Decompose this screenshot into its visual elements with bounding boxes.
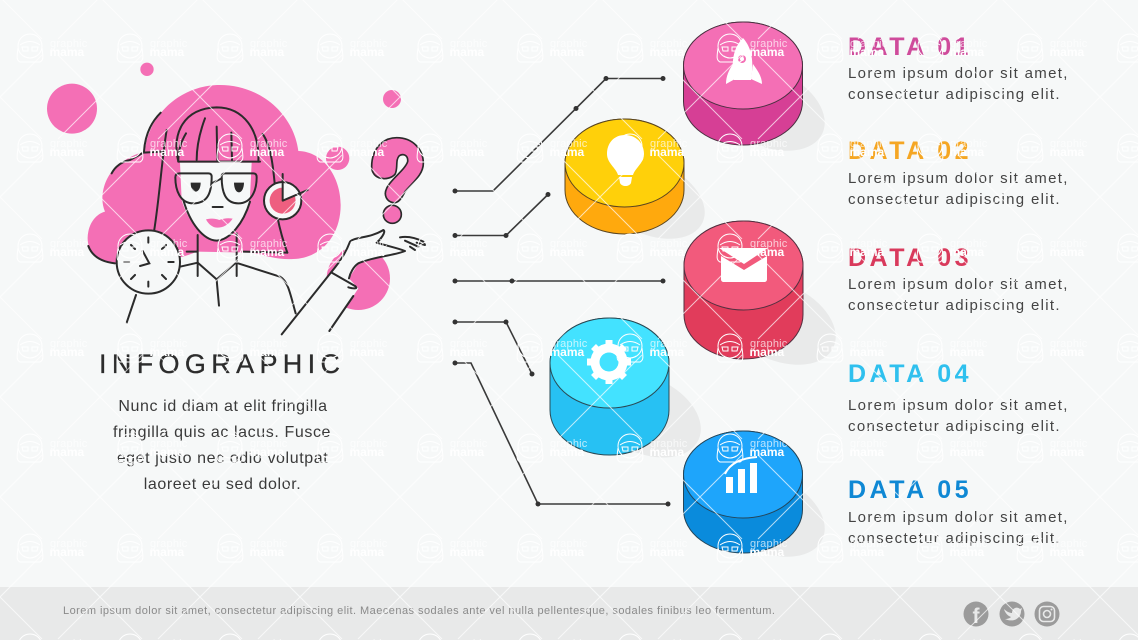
data 05 text: Lorem ipsum dolor sit amet, xyxy=(848,509,1069,526)
pink decorative circles xyxy=(47,63,401,310)
icon: instagram xyxy=(1034,602,1060,626)
cylinder 3: red envelope xyxy=(684,221,849,382)
arm and hand fill xyxy=(282,230,405,334)
data 04 text: DATA 04 xyxy=(848,360,972,388)
cylinder 4: cyan gear xyxy=(550,318,715,474)
connector 1 xyxy=(452,76,666,194)
data 05 text: DATA 05 xyxy=(848,476,972,504)
connector lines xyxy=(452,76,670,506)
intro paragraph: eget justo nec odio volutpat xyxy=(117,450,328,467)
data 01 text: Lorem ipsum dolor sit amet, xyxy=(848,65,1069,82)
wall clock xyxy=(117,230,180,294)
data 01 text: consectetur adipiscing elit. xyxy=(848,86,1061,103)
icon: gear xyxy=(587,340,631,384)
face xyxy=(180,163,252,241)
data 02 text xyxy=(848,137,1069,208)
icon: light bulb xyxy=(607,135,644,186)
data 01 text xyxy=(848,33,1069,103)
footer band xyxy=(0,587,1138,640)
data 02 text: Lorem ipsum dolor sit amet, xyxy=(848,170,1069,187)
connector 4 xyxy=(452,320,534,376)
footer text: Lorem ipsum dolor sit amet, consectetur adipiscing elit. Maecenas sodales ante vel nulla pellentesque, sodales finibus leo fermentum. xyxy=(63,605,775,617)
intro paragraph xyxy=(113,398,331,493)
icon: twitter xyxy=(1000,602,1024,626)
data 03 text xyxy=(848,244,1069,314)
data 05 text: consectetur adipiscing elit. xyxy=(848,530,1061,547)
connector 3 xyxy=(452,278,666,284)
pink hair cloud xyxy=(88,85,341,264)
data 04 text xyxy=(848,360,1069,435)
eyes xyxy=(191,183,244,192)
data 05 text xyxy=(848,476,1069,547)
data 03 text: consectetur adipiscing elit. xyxy=(848,297,1061,314)
data 04 text: Lorem ipsum dolor sit amet, xyxy=(848,397,1069,414)
intro paragraph: Nunc id diam at elit fringilla xyxy=(118,398,328,415)
connector 5 xyxy=(452,360,670,506)
line art xyxy=(88,107,425,334)
pie chart clock xyxy=(264,174,308,219)
data 04 text: consectetur adipiscing elit. xyxy=(848,418,1061,435)
illustration: woman with clock and question mark xyxy=(47,63,425,334)
data 02 text: consectetur adipiscing elit. xyxy=(848,191,1061,208)
cylinder 5: blue bars xyxy=(684,431,838,574)
title: INFOGRAPHIC xyxy=(99,349,345,379)
connector 2 xyxy=(452,192,550,238)
icon: envelope xyxy=(719,248,768,282)
intro paragraph: fringilla quis ac lacus. Fusce xyxy=(113,424,331,441)
data 03 text: Lorem ipsum dolor sit amet, xyxy=(848,276,1069,293)
intro paragraph: laoreet eu sed dolor. xyxy=(144,476,301,493)
cylinder 2: yellow bulb xyxy=(565,119,718,255)
data 01 text: DATA 01 xyxy=(848,33,972,61)
question mark xyxy=(372,138,423,223)
data 03 text: DATA 03 xyxy=(848,244,972,272)
icon: rocket xyxy=(726,38,762,84)
lips xyxy=(206,218,233,228)
social icons xyxy=(964,602,1060,628)
icon: facebook: f xyxy=(972,605,980,628)
data 02 text: DATA 02 xyxy=(848,137,972,165)
icon: bar chart xyxy=(725,457,757,493)
cylinder 1: pink rocket xyxy=(684,22,838,168)
